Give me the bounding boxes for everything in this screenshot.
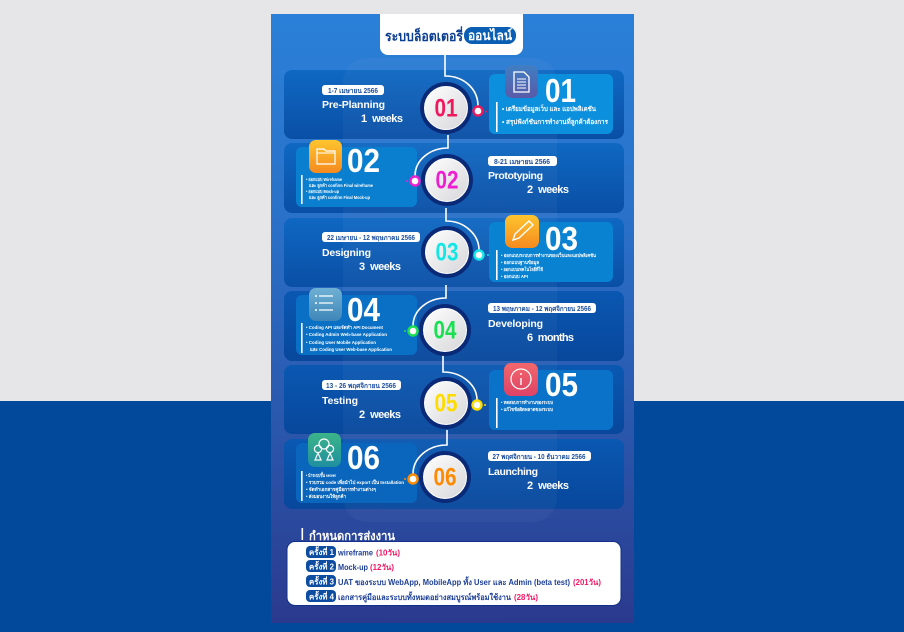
step 03 node: 03 [436, 238, 458, 266]
phase label: Designing: Designing [322, 247, 371, 259]
detail card 02: 02 [347, 142, 380, 179]
detail card 03: • ออกแบบเทคโนโลยีที่ใช้ [501, 265, 544, 273]
detail card 03 [489, 220, 613, 282]
page background: lower blue band [0, 401, 904, 632]
detail card 03: • ออกแบบฐานข้อมูล [501, 259, 539, 267]
title: ออนไลน์ [468, 27, 512, 43]
phase label: Pre-Planning: 1-7 เมษายน 2566 [328, 88, 378, 95]
phase label: Designing: 22 เมษายน - 12 พฤษภาคม 2566 [327, 235, 415, 242]
detail card 06: • ส่งมอบงานให้ลูกค้า [306, 493, 346, 501]
icon: info [504, 363, 538, 396]
detail card 03: • ออกแบบ API [501, 274, 529, 280]
detail card 04: และ Coding User Web-base Application [310, 347, 392, 353]
step 06 node [404, 451, 471, 503]
delivery 3 [306, 575, 601, 587]
phase label: Testing: 2 weeks [359, 409, 401, 421]
phase label: Developing: 6 months [527, 332, 574, 344]
row 4 band [284, 291, 624, 361]
delivery 1: ครั้งที่ 1 [309, 546, 335, 557]
detail card 06: • จัดทำเอกสารคู่มือการทำงานต่างๆ [306, 486, 376, 494]
detail card 02: • ออกแบบ Wireframe [306, 177, 342, 182]
delivery 2: ครั้งที่ 2 [309, 560, 335, 572]
detail card 02: และ ลูกค้า confirm Final wireframe [309, 182, 373, 189]
phase label: Prototyping [488, 156, 569, 196]
row 5 band [284, 365, 624, 434]
phase label: Launching: 27 พฤศจิกายน - 10 ธันวาคม 2566 [492, 453, 586, 461]
delivery 3: UAT ของระบบ WebApp, MobileApp ทั้ง User และ Admin (beta test) [338, 576, 570, 587]
page background: upper grey band [0, 0, 904, 401]
detail card 06 [296, 439, 417, 503]
row 6 band [284, 439, 624, 509]
row 3 band [284, 218, 624, 287]
delivery 2: (12วัน) [370, 563, 394, 572]
phase label: Pre-Planning: 1 weeks [361, 113, 403, 125]
step 03 node [421, 226, 489, 278]
step 04 node: 04 [434, 316, 457, 344]
delivery 2: Mock-up [338, 563, 368, 572]
delivery 1: wireframe [337, 548, 374, 558]
step 06 node: 06 [434, 464, 456, 492]
phase label: Launching: 2 weeks [527, 480, 569, 492]
phase label: Launching [488, 451, 591, 492]
detail card 02: และ ลูกค้า confirm Final Mock-up [309, 194, 370, 201]
step 01 node: 01 [434, 94, 458, 122]
phase label: Pre-Planning: Pre-Planning [322, 99, 385, 111]
detail card 04 [296, 291, 417, 355]
detail card 04: • Coding API และจัดทำ API Document [306, 324, 383, 331]
phase label: Prototyping: 2 weeks [527, 184, 569, 196]
detail card 05: 05 [545, 366, 578, 403]
detail card 05 [489, 366, 613, 430]
delivery 4 [306, 590, 538, 603]
phase label: Designing [322, 232, 420, 273]
detail card 02 [296, 142, 417, 207]
delivery 3: ครั้งที่ 3 [309, 576, 335, 586]
step 04 node [404, 304, 471, 356]
detail card 01: • เตรียมข้อมูลเว็บ และ แอปพลิเคชัน [502, 104, 597, 114]
detail card 05: • แก้ไขข้อผิดพลาดของระบบ [501, 406, 553, 413]
detail card 06: • รวบรวม code เพื่อนำไป export เป็น Installation [306, 478, 404, 486]
detail card 05: • ทดสอบการทำงานของระบบ [501, 399, 553, 406]
icon: folder [309, 140, 342, 173]
title [380, 14, 523, 55]
detail card 04: • Coding User Mobile Application [306, 340, 376, 346]
delivery 3: (201วัน) [573, 578, 601, 587]
phase label: Prototyping: 8-21 เมษายน 2566 [494, 159, 550, 166]
step 01 node [420, 82, 487, 134]
phase label: Testing: Testing [322, 395, 358, 407]
phase label: Pre-Planning [322, 85, 403, 125]
delivery 1: (10วัน) [376, 548, 400, 558]
step 05 node [420, 377, 486, 429]
phase label: Testing: 13 - 26 พฤศจิกายน 2566 [326, 382, 396, 390]
timeline connectors [413, 55, 479, 474]
step 02 node [406, 154, 473, 206]
heading: delivery schedule: กำหนดการส่งงาน [309, 529, 396, 543]
title: ระบบล็อตเตอรี่ [385, 26, 463, 44]
phase label: Developing: 13 พฤษภาคม - 12 พฤศจิกายน 2566 [493, 305, 591, 313]
icon: document [505, 65, 538, 98]
row 1 band [284, 70, 624, 139]
phase label: Developing [488, 303, 596, 344]
delivery 4: ครั้งที่ 4 [309, 590, 335, 602]
icon: list [309, 288, 342, 321]
detail card 03: 03 [545, 220, 578, 257]
delivery 1 [306, 546, 400, 558]
step 05 node: 05 [434, 390, 458, 418]
icon: pencil [505, 215, 539, 248]
delivery 4: เอกสารคู่มือและระบบทั้งหมดอย่างสมบูรณ์พร้อมใช้งาน [338, 591, 511, 603]
delivery 4: (28วัน) [514, 593, 538, 602]
delivery schedule panel [287, 542, 621, 606]
detail card 01 [489, 72, 613, 134]
detail card 04: • Coding Admin Web-base Application [306, 332, 387, 338]
delivery 2 [306, 560, 394, 572]
faint device outline over rows [343, 58, 557, 522]
detail card 01: • สรุปฟังก์ชันการทำงานที่ลูกค้าต้องการ [502, 116, 608, 127]
main poster panel [271, 14, 634, 623]
phase label: Testing [322, 380, 401, 421]
phase label: Developing: Developing [488, 318, 543, 330]
detail card 01: 01 [545, 72, 576, 109]
detail card 03: • ออกแบบระบบการทำงานของเว็บและแอปพลิเคชัน [501, 251, 597, 259]
phase label: Designing: 3 weeks [359, 261, 401, 273]
phase label: Launching: Launching [488, 466, 538, 478]
step 02 node: 02 [436, 166, 458, 194]
detail card 06: 06 [347, 439, 380, 476]
detail card 04: 04 [347, 291, 381, 328]
detail card 06: • นำระบบขึ้น server [306, 471, 336, 479]
icon: people [308, 433, 341, 467]
detail card 02: • ออกแบบ Mock-up [306, 189, 339, 194]
phase label: Prototyping: Prototyping [488, 170, 543, 182]
row 2 band [284, 143, 624, 213]
